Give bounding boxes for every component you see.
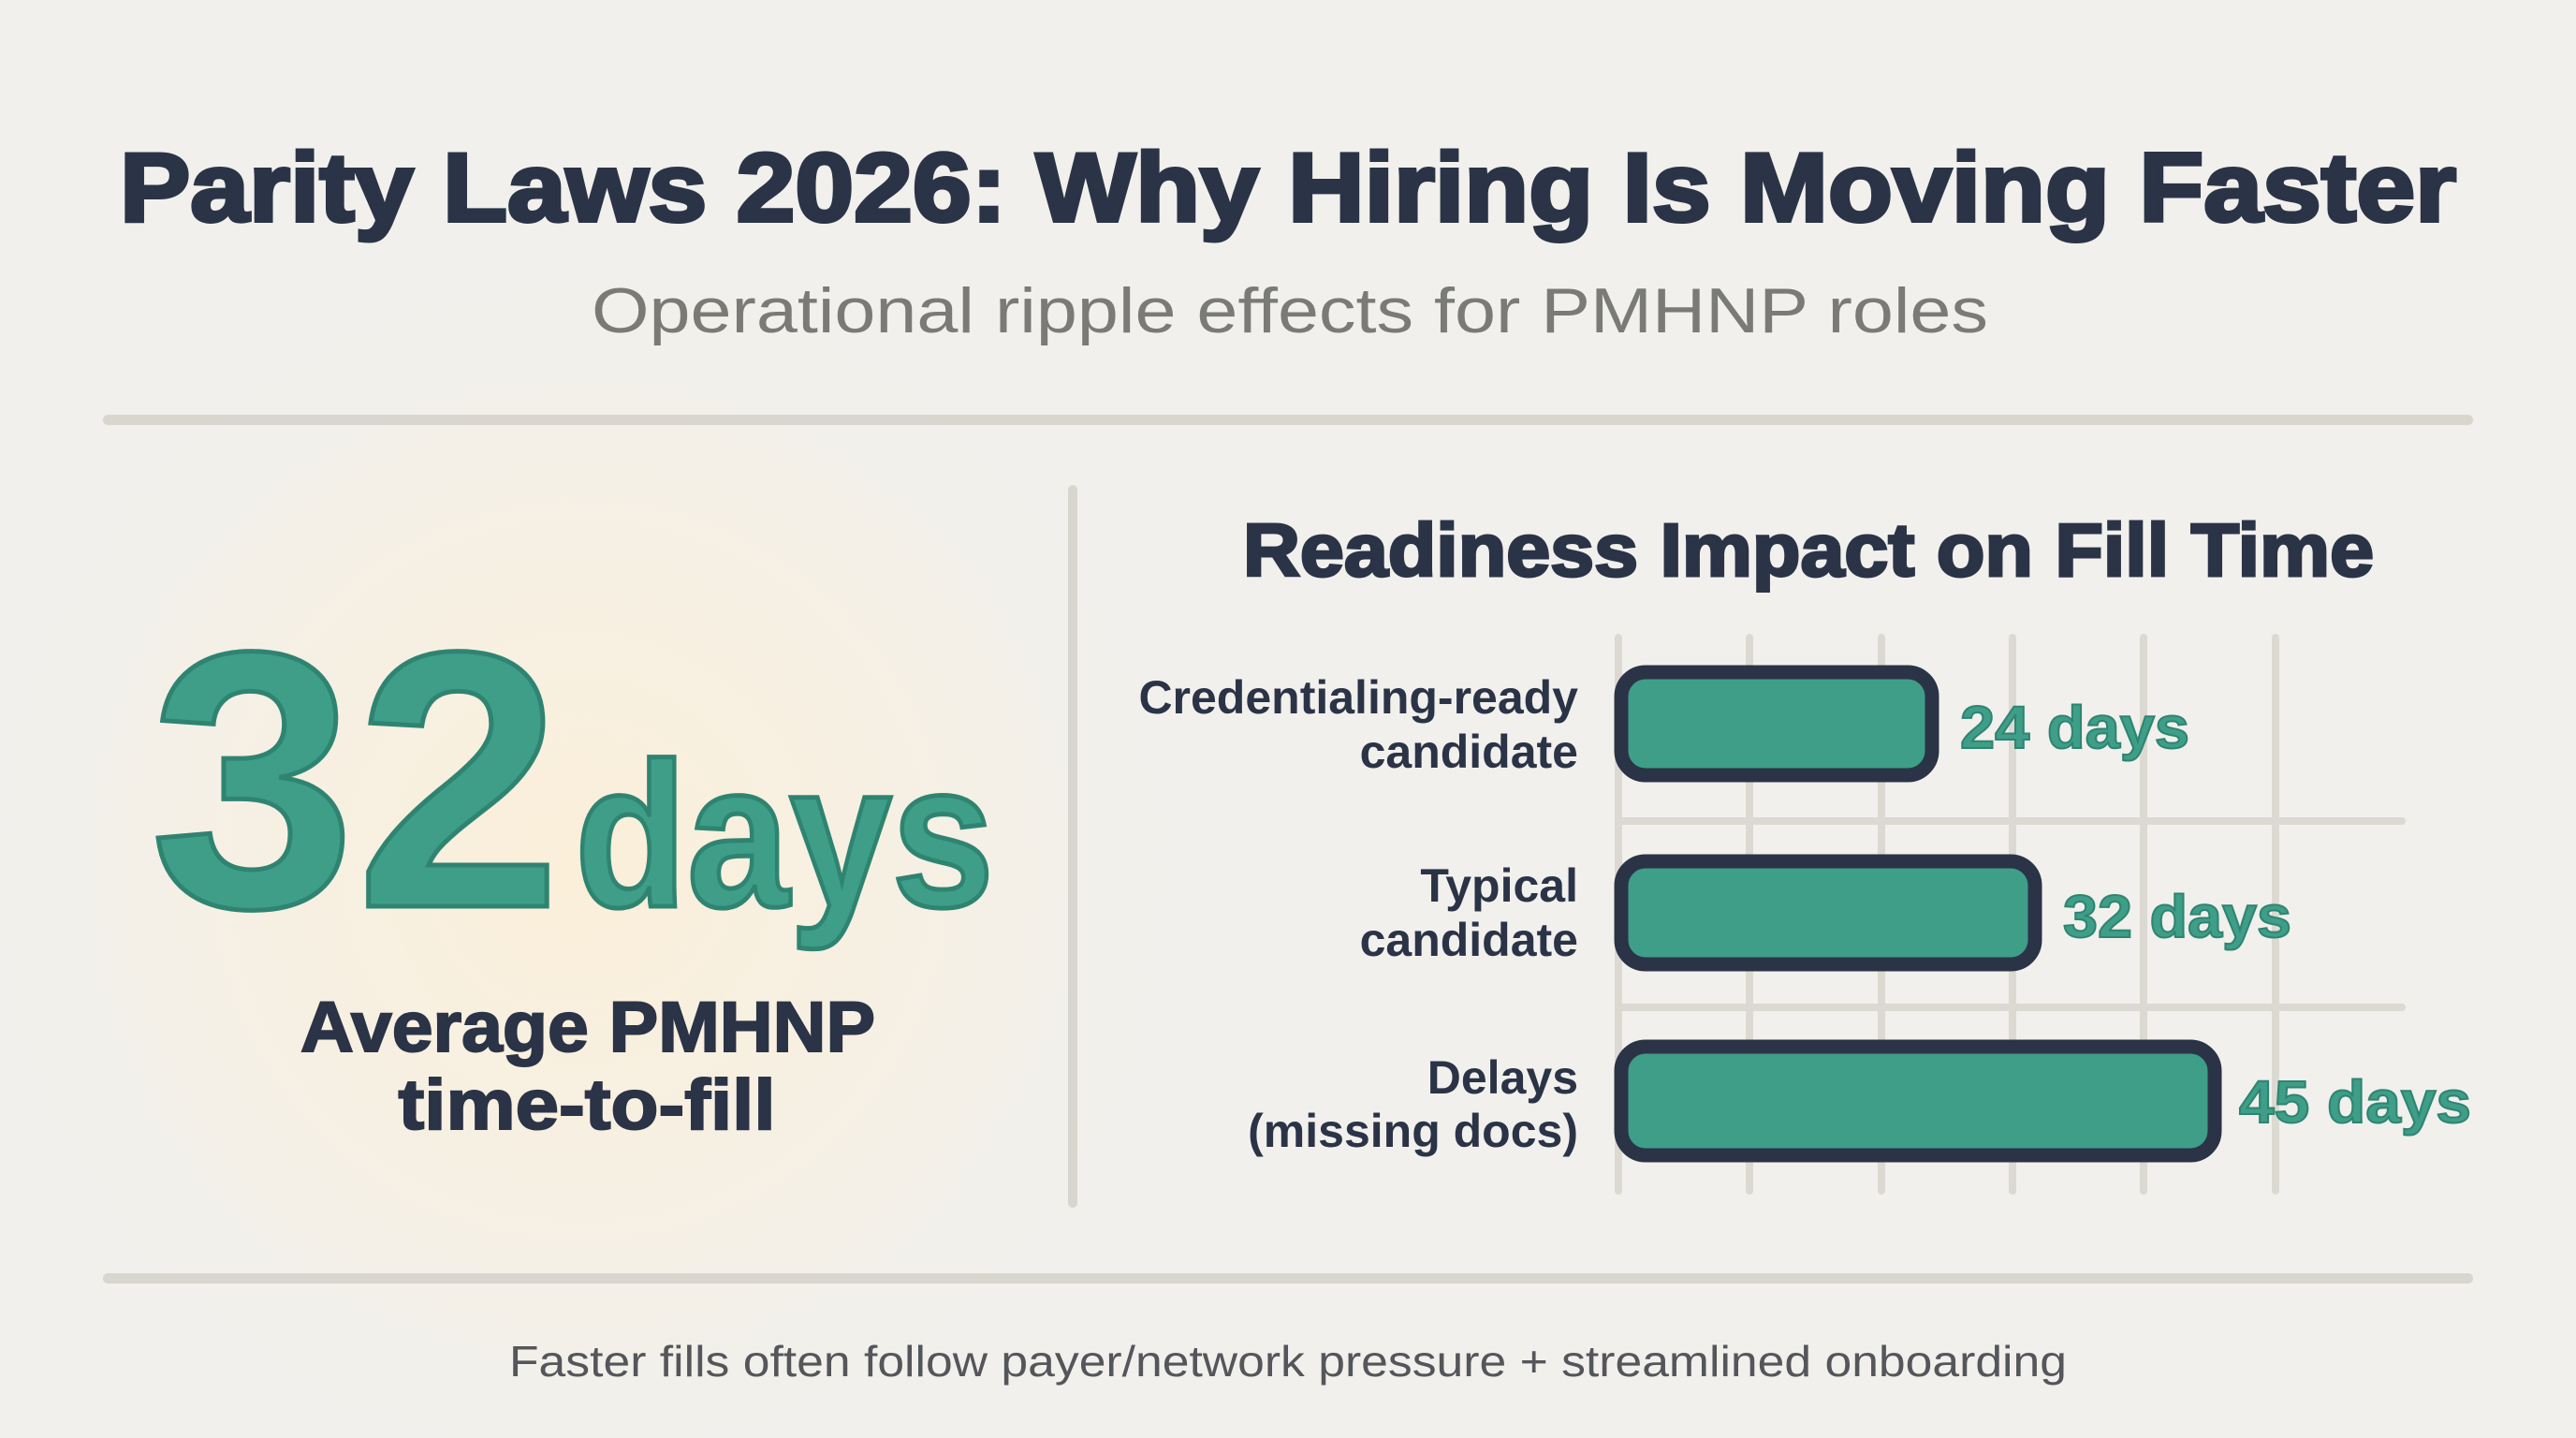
big stat: 32 days: days xyxy=(575,720,994,950)
row labels: candidate xyxy=(1360,914,1578,966)
footer note: Faster fills often follow payer/network pressure + streamlined onboarding xyxy=(509,1337,2067,1386)
stat label xyxy=(300,988,875,1145)
bar chart xyxy=(1138,638,2471,1191)
value labels: 32 days xyxy=(2063,883,2291,950)
row labels: Delays xyxy=(1427,1051,1578,1104)
value labels: 45 days xyxy=(2239,1068,2471,1136)
value labels xyxy=(1960,694,2471,1136)
bar: delays xyxy=(1621,1047,2215,1155)
row labels: (missing docs) xyxy=(1248,1105,1578,1157)
row labels: candidate xyxy=(1360,726,1578,778)
row labels: Credentialing-ready xyxy=(1138,671,1578,724)
subtitle: Operational ripple effects for PMHNP roles xyxy=(592,275,1988,346)
value labels: 24 days xyxy=(1960,694,2189,761)
big stat: 32 days xyxy=(150,576,994,984)
row labels: Typical xyxy=(1420,859,1578,912)
stat label: Average PMHNP xyxy=(300,988,875,1067)
big stat: 32 days: 32 xyxy=(150,576,562,984)
stat label: time-to-fill xyxy=(399,1065,775,1145)
chart title: Readiness Impact on Fill Time xyxy=(1243,508,2374,592)
bar: credentialing-ready xyxy=(1621,672,1932,775)
bar: typical xyxy=(1621,861,2035,964)
row labels xyxy=(1138,671,1578,1157)
title: Parity Laws 2026: Why Hiring Is Moving Faster xyxy=(120,134,2456,242)
